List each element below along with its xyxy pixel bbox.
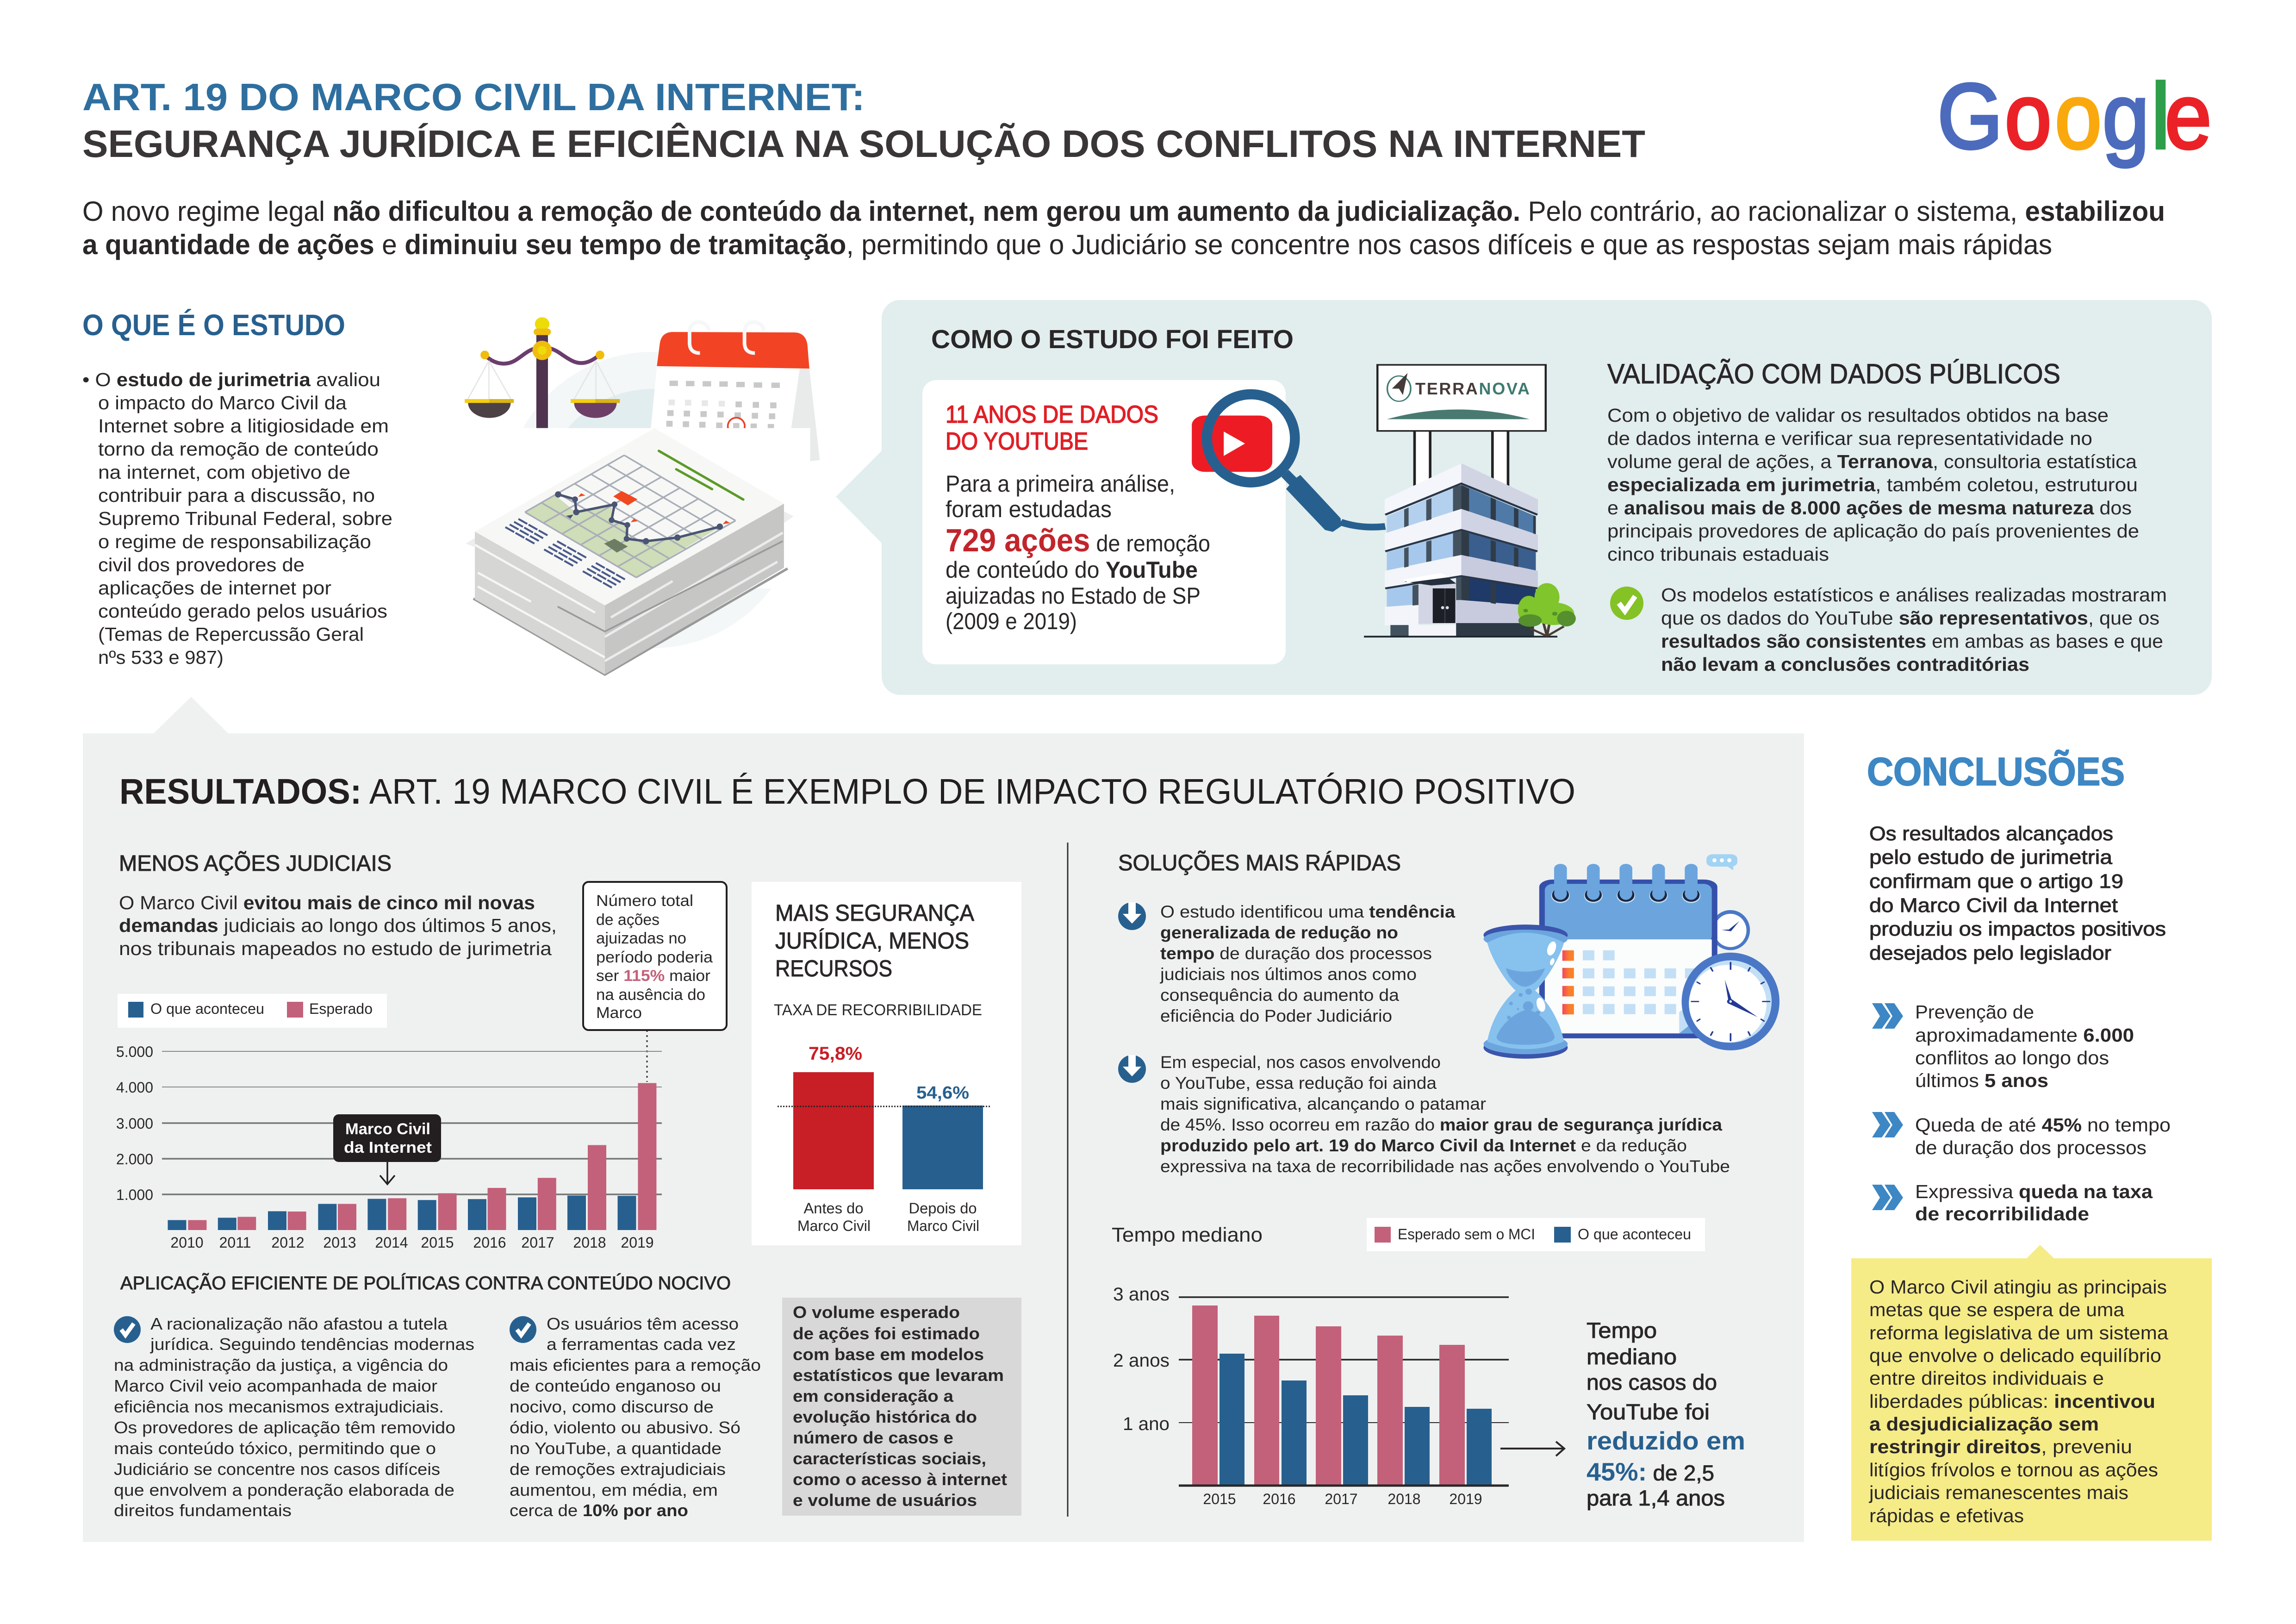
card: 11 anos de dados do youtube	[922, 380, 1286, 664]
bar chart: ações judiciais 2010-2019: 3.000	[116, 1115, 153, 1132]
callout: número total: Marco	[596, 1004, 642, 1022]
icon: blue check 1	[114, 1316, 141, 1343]
callout: marco civil metas: litígios frívolos e tornou as ações	[1869, 1459, 2158, 1480]
text block: validação: de dados interna e verificar sua representatividade no	[1607, 428, 2092, 449]
icon: hourglass	[1483, 924, 1568, 1059]
card: 11 anos de dados do youtube: de conteúdo do YouTube	[946, 557, 1198, 583]
note box: volume esperado: de ações foi estimado	[793, 1324, 980, 1343]
text block: a racionalização: Marco Civil veio acompanhada de maior	[114, 1376, 437, 1395]
text block: reduzido em 45%: mediano	[1587, 1344, 1677, 1369]
text block: os usuários: Os usuários têm acesso	[547, 1314, 739, 1333]
logo: Google: G	[1937, 64, 2003, 168]
text block: reduzido em 45%: nos casos do	[1587, 1370, 1717, 1394]
text block: os usuários: ódio, violento ou abusivo. Só	[510, 1418, 740, 1437]
heading: soluções mais rápidas: SOLUÇÕES MAIS RÁPIDAS	[1118, 850, 1401, 875]
panel: mais segurança jurídica: RECURSOS	[775, 956, 892, 981]
text block: em especial youtube: produzido pelo art. 19 do Marco Civil da Internet e da redução	[1160, 1136, 1687, 1155]
text block: os usuários: no YouTube, a quantidade	[510, 1439, 722, 1458]
text block: menos ações: demandas judiciais ao longo dos últimos 5 anos,	[119, 915, 557, 936]
callout: marco civil metas: O Marco Civil atingiu as principais	[1869, 1276, 2167, 1298]
text block: reduzido em 45%: reduzido em	[1587, 1426, 1745, 1455]
text block: validação	[1607, 405, 2139, 565]
text block: resultados alcançados: do Marco Civil da Internet	[1869, 894, 2118, 917]
text block: a racionalização: que envolvem a ponderação elaborada de	[114, 1480, 454, 1499]
callout: marco civil metas	[1851, 1245, 2212, 1541]
callout: marco civil metas: reforma legislativa de um sistema	[1869, 1322, 2168, 1343]
text block: prevenção: aproximadamente 6.000	[1915, 1024, 2134, 1046]
text block: expressiva queda	[1915, 1181, 2153, 1224]
text block: resultados alcançados: desejados pelo legislador	[1869, 942, 2111, 964]
heading: menos ações judiciais: MENOS AÇÕES JUDICIAIS	[119, 851, 392, 876]
text block: queda de até 45%: Queda de até 45% no tempo	[1915, 1114, 2171, 1136]
text block: a racionalização: jurídica. Seguindo tendências modernas	[150, 1335, 474, 1354]
text block: tendência generalizada: judiciais nos últimos anos como	[1160, 965, 1417, 984]
text block: os usuários: cerca de 10% por ano	[510, 1501, 688, 1520]
intro text	[82, 196, 2165, 260]
panel: mais segurança jurídica: JURÍDICA, MENOS	[775, 928, 969, 954]
text block: o que é o estudo: torno da remoção de conteúdo	[98, 438, 379, 460]
sign text: terranova: TERRANOVA	[1415, 379, 1530, 398]
note box: volume esperado	[782, 1298, 1021, 1516]
intro text: a quantidade de ações e diminuiu seu tempo de tramitação, permitindo que o Judiciário se concentre nos casos difíceis e que as respostas sejam mais rápidas	[82, 229, 2052, 260]
callout: número total: na ausência do	[596, 986, 705, 1004]
logo: Google: e	[2165, 64, 2212, 168]
text block: a racionalização: mais conteúdo tóxico, permitindo que o	[114, 1439, 436, 1458]
callout: marco civil da internet	[333, 1114, 441, 1184]
arrow: to tempo mediano note	[1500, 1442, 1564, 1456]
text block: os usuários: de remoções extrajudiciais	[510, 1460, 726, 1479]
bar chart: tempo mediano: 2017	[1325, 1491, 1358, 1507]
text block: o que é o estudo: civil dos provedores de	[98, 554, 305, 575]
text block: o que é o estudo: (Temas de Repercussão Geral	[98, 624, 364, 645]
note box: volume esperado: número de casos e	[793, 1428, 953, 1447]
callout: marco civil metas: judiciais remanescentes mais	[1869, 1482, 2128, 1503]
callout: marco civil metas: restringir direitos , preveniu	[1869, 1436, 2132, 1457]
callout: marco civil metas: rápidas e efetivas	[1869, 1505, 2024, 1526]
logo: Google	[1937, 64, 2212, 168]
legend: tempo mediano: O que aconteceu	[1578, 1226, 1691, 1243]
legend: tempo mediano: Esperado sem o MCI	[1398, 1226, 1535, 1243]
text block: resultados alcançados: confirmam que o artigo 19	[1869, 870, 2123, 893]
text block: prevenção: conflitos ao longo dos	[1915, 1047, 2109, 1068]
text block: o que é o estudo: o impacto do Marco Civil da	[98, 392, 347, 413]
text block: validação: especializada em jurimetria , também coletou, estruturou	[1607, 474, 2138, 495]
bar chart: taxa de recorribilidade: 75,8%	[809, 1043, 862, 1064]
icon: down arrow 2	[1118, 1055, 1146, 1083]
icon: magnifier over youtube logo	[1192, 389, 1385, 532]
title: SEGURANÇA JURÍDICA E EFICIÊNCIA NA SOLUÇÃO DOS CONFLITOS NA INTERNET	[82, 122, 1645, 165]
intro text: O novo regime legal não dificultou a remoção de conteúdo da internet, nem gerou um aumento da judicialização. Pelo contrário, ao racionalizar o sistema, estabilizou	[82, 196, 2165, 227]
callout: número total: de ações	[596, 911, 660, 929]
bar chart: taxa de recorribilidade	[778, 1043, 991, 1234]
text block: resultados alcançados: produziu os impactos positivos	[1869, 918, 2166, 940]
callout: número total: período poderia	[596, 949, 713, 966]
panel: mais segurança jurídica	[752, 882, 1021, 1245]
icon: blue check 2	[510, 1316, 536, 1343]
text block: em especial youtube: de 45%. Isso ocorreu em razão do maior grau de segurança jurídica	[1160, 1115, 1722, 1134]
text block: tendência generalizada: tempo de duração dos processos	[1160, 944, 1432, 963]
callout: marco civil da internet: Marco Civil	[345, 1120, 430, 1138]
bar chart: tempo mediano: 2015	[1203, 1491, 1236, 1507]
icon: speech bubble	[1706, 854, 1737, 870]
heading: o que é o estudo: O QUE É O ESTUDO	[82, 308, 345, 342]
bar chart: tempo mediano: 1 ano	[1123, 1414, 1170, 1434]
text block: validação: e analisou mais de 8.000 ações de mesma natureza dos	[1607, 497, 2132, 518]
bar chart: taxa de recorribilidade: 54,6%	[916, 1083, 969, 1103]
text block: modelos estatísticos	[1661, 584, 2167, 675]
text block: expressiva queda: de recorribilidade	[1915, 1203, 2089, 1224]
text block: a racionalização: A racionalização não afastou a tutela	[150, 1314, 448, 1333]
panel: resultados	[83, 697, 1804, 1542]
text block: os usuários: a ferramentas cada vez	[547, 1335, 736, 1354]
text block: tendência generalizada: consequência do aumento da	[1160, 986, 1399, 1005]
title: ART. 19 DO MARCO CIVIL DA INTERNET:	[82, 75, 865, 119]
bar chart: tempo mediano: 2 anos	[1113, 1350, 1170, 1371]
bar chart: ações judiciais 2010-2019: 2011	[219, 1234, 251, 1251]
heading: conclusões: CONCLUSÕES	[1867, 750, 2125, 794]
text block: menos ações: nos tribunais mapeados no estudo de jurimetria	[119, 938, 552, 959]
bar chart: tempo mediano: 2019	[1449, 1491, 1482, 1507]
bar chart: ações judiciais 2010-2019: 2018	[573, 1234, 606, 1251]
heading: tempo mediano: Tempo mediano	[1112, 1224, 1263, 1246]
text block: em especial youtube: o YouTube, essa redução foi ainda	[1160, 1074, 1437, 1093]
legend: tempo mediano	[1367, 1218, 1705, 1251]
bar chart: ações judiciais 2010-2019: 4.000	[116, 1079, 153, 1096]
text block: o que é o estudo: o regime de responsabilização	[98, 531, 371, 552]
text block: resultados alcançados: Os resultados alcançados	[1869, 823, 2113, 845]
text block: o que é o estudo: Supremo Tribunal Federal, sobre	[98, 508, 392, 529]
text block: prevenção	[1915, 1001, 2134, 1091]
text block: prevenção: Prevenção de	[1915, 1001, 2034, 1023]
panel: como o estudo foi feito	[836, 300, 2212, 695]
text block: os usuários: nocivo, como discurso de	[510, 1397, 714, 1416]
text block: menos ações: O Marco Civil evitou mais de cinco mil novas	[119, 892, 535, 913]
text block: o que é o estudo: aplicações de internet por	[98, 577, 331, 599]
panel: mais segurança jurídica: TAXA DE RECORRIBILIDADE	[774, 1001, 982, 1019]
text block: em especial youtube: mais significativa, alcançando o patamar	[1160, 1094, 1486, 1113]
callout: marco civil metas: que envolve o delicado equilíbrio	[1869, 1345, 2161, 1366]
callout: marco civil da internet: da Internet	[344, 1139, 432, 1156]
title	[82, 75, 1645, 165]
icon: chevrons 2	[1872, 1112, 1903, 1137]
bar chart: ações judiciais 2010-2019: 2.000	[116, 1151, 153, 1168]
callout: número total: Número total	[596, 892, 693, 910]
text block: os usuários: de conteúdo enganoso ou	[510, 1376, 721, 1395]
text block: tendência generalizada: generalizada de redução no	[1160, 923, 1398, 942]
callout: marco civil metas: metas que se espera de uma	[1869, 1299, 2124, 1320]
text block: modelos estatísticos: resultados são consistentes em ambas as bases e que	[1661, 631, 2163, 652]
logo: Google: l	[2151, 64, 2170, 168]
icon: chevrons 1	[1872, 1003, 1903, 1029]
text block: em especial youtube: Em especial, nos casos envolvendo	[1160, 1053, 1441, 1072]
heading: aplicação eficiente: APLICAÇÃO EFICIENTE DE POLÍTICAS CONTRA CONTEÚDO NOCIVO	[120, 1273, 731, 1293]
bar chart: tempo mediano: 2018	[1388, 1491, 1421, 1507]
icon: big clock	[1682, 953, 1780, 1050]
bar chart: taxa de recorribilidade: Marco Civil	[797, 1218, 871, 1234]
note box: volume esperado: evolução histórica do	[793, 1407, 977, 1426]
text block: a racionalização	[114, 1314, 474, 1520]
note box: volume esperado: e volume de usuários	[793, 1491, 977, 1510]
text block: reduzido em 45%: Tempo	[1587, 1318, 1657, 1343]
text block: reduzido em 45%	[1587, 1318, 1745, 1510]
callout: número total	[583, 882, 727, 1082]
text block: modelos estatísticos: que os dados do YouTube são representativos , que os	[1661, 607, 2159, 629]
bar chart: ações judiciais 2010-2019: 2013	[323, 1234, 356, 1251]
text block: o que é o estudo: Internet sobre a litigiosidade em	[98, 415, 389, 437]
icon: scales	[465, 317, 620, 428]
text block: reduzido em 45%: 45%: de 2,5	[1587, 1457, 1714, 1486]
callout: marco civil metas: a desjudicialização sem	[1869, 1413, 2099, 1435]
icon: stack of papers with chart	[466, 428, 794, 675]
text block: o que é o estudo	[82, 369, 392, 668]
text block: prevenção: últimos 5 anos	[1915, 1070, 2048, 1091]
bar chart: ações judiciais 2010-2019	[116, 1043, 662, 1251]
text block: validação: cinco tribunais estaduais	[1607, 543, 1829, 565]
note box: volume esperado: O volume esperado	[793, 1303, 960, 1322]
bar chart: ações judiciais 2010-2019: 2017	[521, 1234, 554, 1251]
text block: queda de até 45%: de duração dos processos	[1915, 1137, 2147, 1158]
note box: volume esperado: em consideração a	[793, 1387, 954, 1405]
text block: a racionalização: direitos fundamentais	[114, 1501, 292, 1520]
card: 11 anos de dados do youtube: foram estudadas	[946, 496, 1112, 522]
callout: marco civil metas: entre direitos individuais e	[1869, 1368, 2104, 1389]
card: 11 anos de dados do youtube: ajuizadas no Estado de SP	[946, 583, 1201, 609]
note box: volume esperado: com base em modelos	[793, 1345, 984, 1364]
card: 11 anos de dados do youtube: Para a primeira análise,	[946, 471, 1175, 497]
bar chart: ações judiciais 2010-2019: 2014	[375, 1234, 408, 1251]
icon: down arrow 1	[1118, 902, 1146, 930]
text block: os usuários: aumentou, em média, em	[510, 1480, 718, 1499]
icon: terranova building	[1364, 365, 1557, 637]
text block: validação: Com o objetivo de validar os resultados obtidos na base	[1607, 405, 2109, 426]
bar chart: taxa de recorribilidade: Antes do	[803, 1200, 864, 1217]
icon: small clock	[1711, 910, 1750, 950]
card: 11 anos de dados do youtube: 729 ações de remoção	[946, 522, 1210, 558]
text block: menos ações	[119, 892, 557, 959]
icon: green check	[1610, 587, 1643, 620]
icon: tree	[1518, 583, 1576, 636]
bar chart: ações judiciais 2010-2019: 1.000	[116, 1187, 153, 1203]
text block: os usuários	[510, 1314, 761, 1520]
text block: o que é o estudo: nºs 533 e 987)	[98, 647, 224, 668]
panel: conclusões	[1851, 750, 2212, 1541]
logo: Google: g	[2103, 64, 2149, 168]
card: 11 anos de dados do youtube: (2009 e 2019)	[946, 608, 1077, 634]
bar chart: tempo mediano: 2016	[1263, 1491, 1296, 1507]
text block: expressiva queda: Expressiva queda na taxa	[1915, 1181, 2153, 1202]
callout: número total: ajuizadas no	[596, 930, 686, 947]
text block: resultados alcançados	[1869, 823, 2166, 964]
text block: modelos estatísticos: Os modelos estatísticos e análises realizadas mostraram	[1661, 584, 2167, 606]
legend: ações judiciais: O que aconteceu	[150, 1000, 264, 1017]
text block: em especial youtube	[1160, 1053, 1730, 1176]
note box: volume esperado: como o acesso à internet	[793, 1470, 1007, 1489]
logo: Google: o	[2055, 64, 2102, 168]
bar chart: tempo mediano	[1113, 1284, 1509, 1507]
bar chart: ações judiciais 2010-2019: 2015	[421, 1234, 454, 1251]
bar chart: ações judiciais 2010-2019: 2012	[271, 1234, 305, 1251]
legend: ações judiciais: Esperado	[309, 1000, 373, 1017]
bar chart: ações judiciais 2010-2019: 2016	[473, 1234, 506, 1251]
note box: volume esperado: características sociais,	[793, 1449, 986, 1468]
panel: mais segurança jurídica: MAIS SEGURANÇA	[775, 900, 975, 926]
text block: em especial youtube: expressiva na taxa de recorribilidade nas ações envolvendo o YouTube	[1160, 1157, 1730, 1176]
text block: reduzido em 45%: para 1,4 anos	[1587, 1486, 1725, 1510]
text block: tendência generalizada: eficiência do Poder Judiciário	[1160, 1006, 1392, 1025]
legend: ações judiciais	[118, 994, 387, 1028]
illustration: scales, calendar and stack of papers	[451, 317, 820, 675]
card: 11 anos de dados do youtube: DO YOUTUBE	[946, 428, 1088, 455]
text block: o que é o estudo: contribuir para a discussão, no	[98, 485, 375, 506]
text block: resultados alcançados: pelo estudo de jurimetria	[1869, 846, 2112, 868]
note box: volume esperado: estatísticos que levaram	[793, 1366, 1004, 1385]
bar chart: ações judiciais 2010-2019: 2019	[621, 1234, 654, 1251]
text block: queda de até 45%	[1915, 1114, 2171, 1158]
icon: wall calendar	[651, 322, 820, 461]
bar chart: ações judiciais 2010-2019: 5.000	[116, 1043, 153, 1060]
icon: chevrons 3	[1872, 1185, 1903, 1210]
bar chart: taxa de recorribilidade: Depois do	[909, 1200, 977, 1217]
bar chart: taxa de recorribilidade: Marco Civil	[907, 1218, 979, 1234]
logo: Google: o	[2005, 64, 2052, 168]
text block: a racionalização: Os provedores de aplicação têm removido	[114, 1418, 455, 1437]
card: 11 anos de dados do youtube: 11 ANOS DE DADOS	[946, 401, 1158, 428]
bar chart: tempo mediano: 3 anos	[1113, 1284, 1170, 1305]
text block: validação: volume geral de ações, a Terranova , consultoria estatística	[1607, 451, 2137, 472]
callout: número total: ser 115% maior	[596, 967, 710, 985]
text block: a racionalização: eficiência nos mecanismos extrajudiciais.	[114, 1397, 444, 1416]
heading: resultados: RESULTADOS: ART. 19 MARCO CIVIL É EXEMPLO DE IMPACTO REGULATÓRIO POSITIVO	[119, 772, 1575, 812]
icon: calendar	[1539, 864, 1717, 1038]
text block: reduzido em 45%: YouTube foi	[1587, 1399, 1710, 1424]
callout: marco civil metas: liberdades públicas: incentivou	[1869, 1391, 2155, 1412]
text block: o que é o estudo: conteúdo gerado pelos usuários	[98, 600, 387, 622]
illustration: calendar, hourglass and clocks	[1483, 854, 1780, 1059]
text block: validação: principais provedores de aplicação do país provenientes de	[1607, 520, 2139, 542]
text block: modelos estatísticos: não levam a conclusões contraditórias	[1661, 654, 2029, 675]
text block: tendência generalizada	[1160, 902, 1455, 1025]
text block: a racionalização: na administração da justiça, a vigência do	[114, 1355, 448, 1374]
heading: como o estudo foi feito: COMO O ESTUDO FOI FEITO	[931, 325, 1294, 354]
text block: tendência generalizada: O estudo identificou uma tendência	[1160, 902, 1455, 921]
bar chart: ações judiciais 2010-2019: 2010	[170, 1234, 204, 1251]
text block: os usuários: mais eficientes para a remoção	[510, 1355, 761, 1374]
text block: o que é o estudo: na internet, com objetivo de	[98, 462, 350, 483]
text block: a racionalização: Judiciário se concentre nos casos difíceis	[114, 1460, 440, 1479]
text block: o que é o estudo: • O estudo de jurimetria avaliou	[82, 369, 380, 390]
heading: validação com dados públicos: VALIDAÇÃO COM DADOS PÚBLICOS	[1607, 358, 2060, 389]
